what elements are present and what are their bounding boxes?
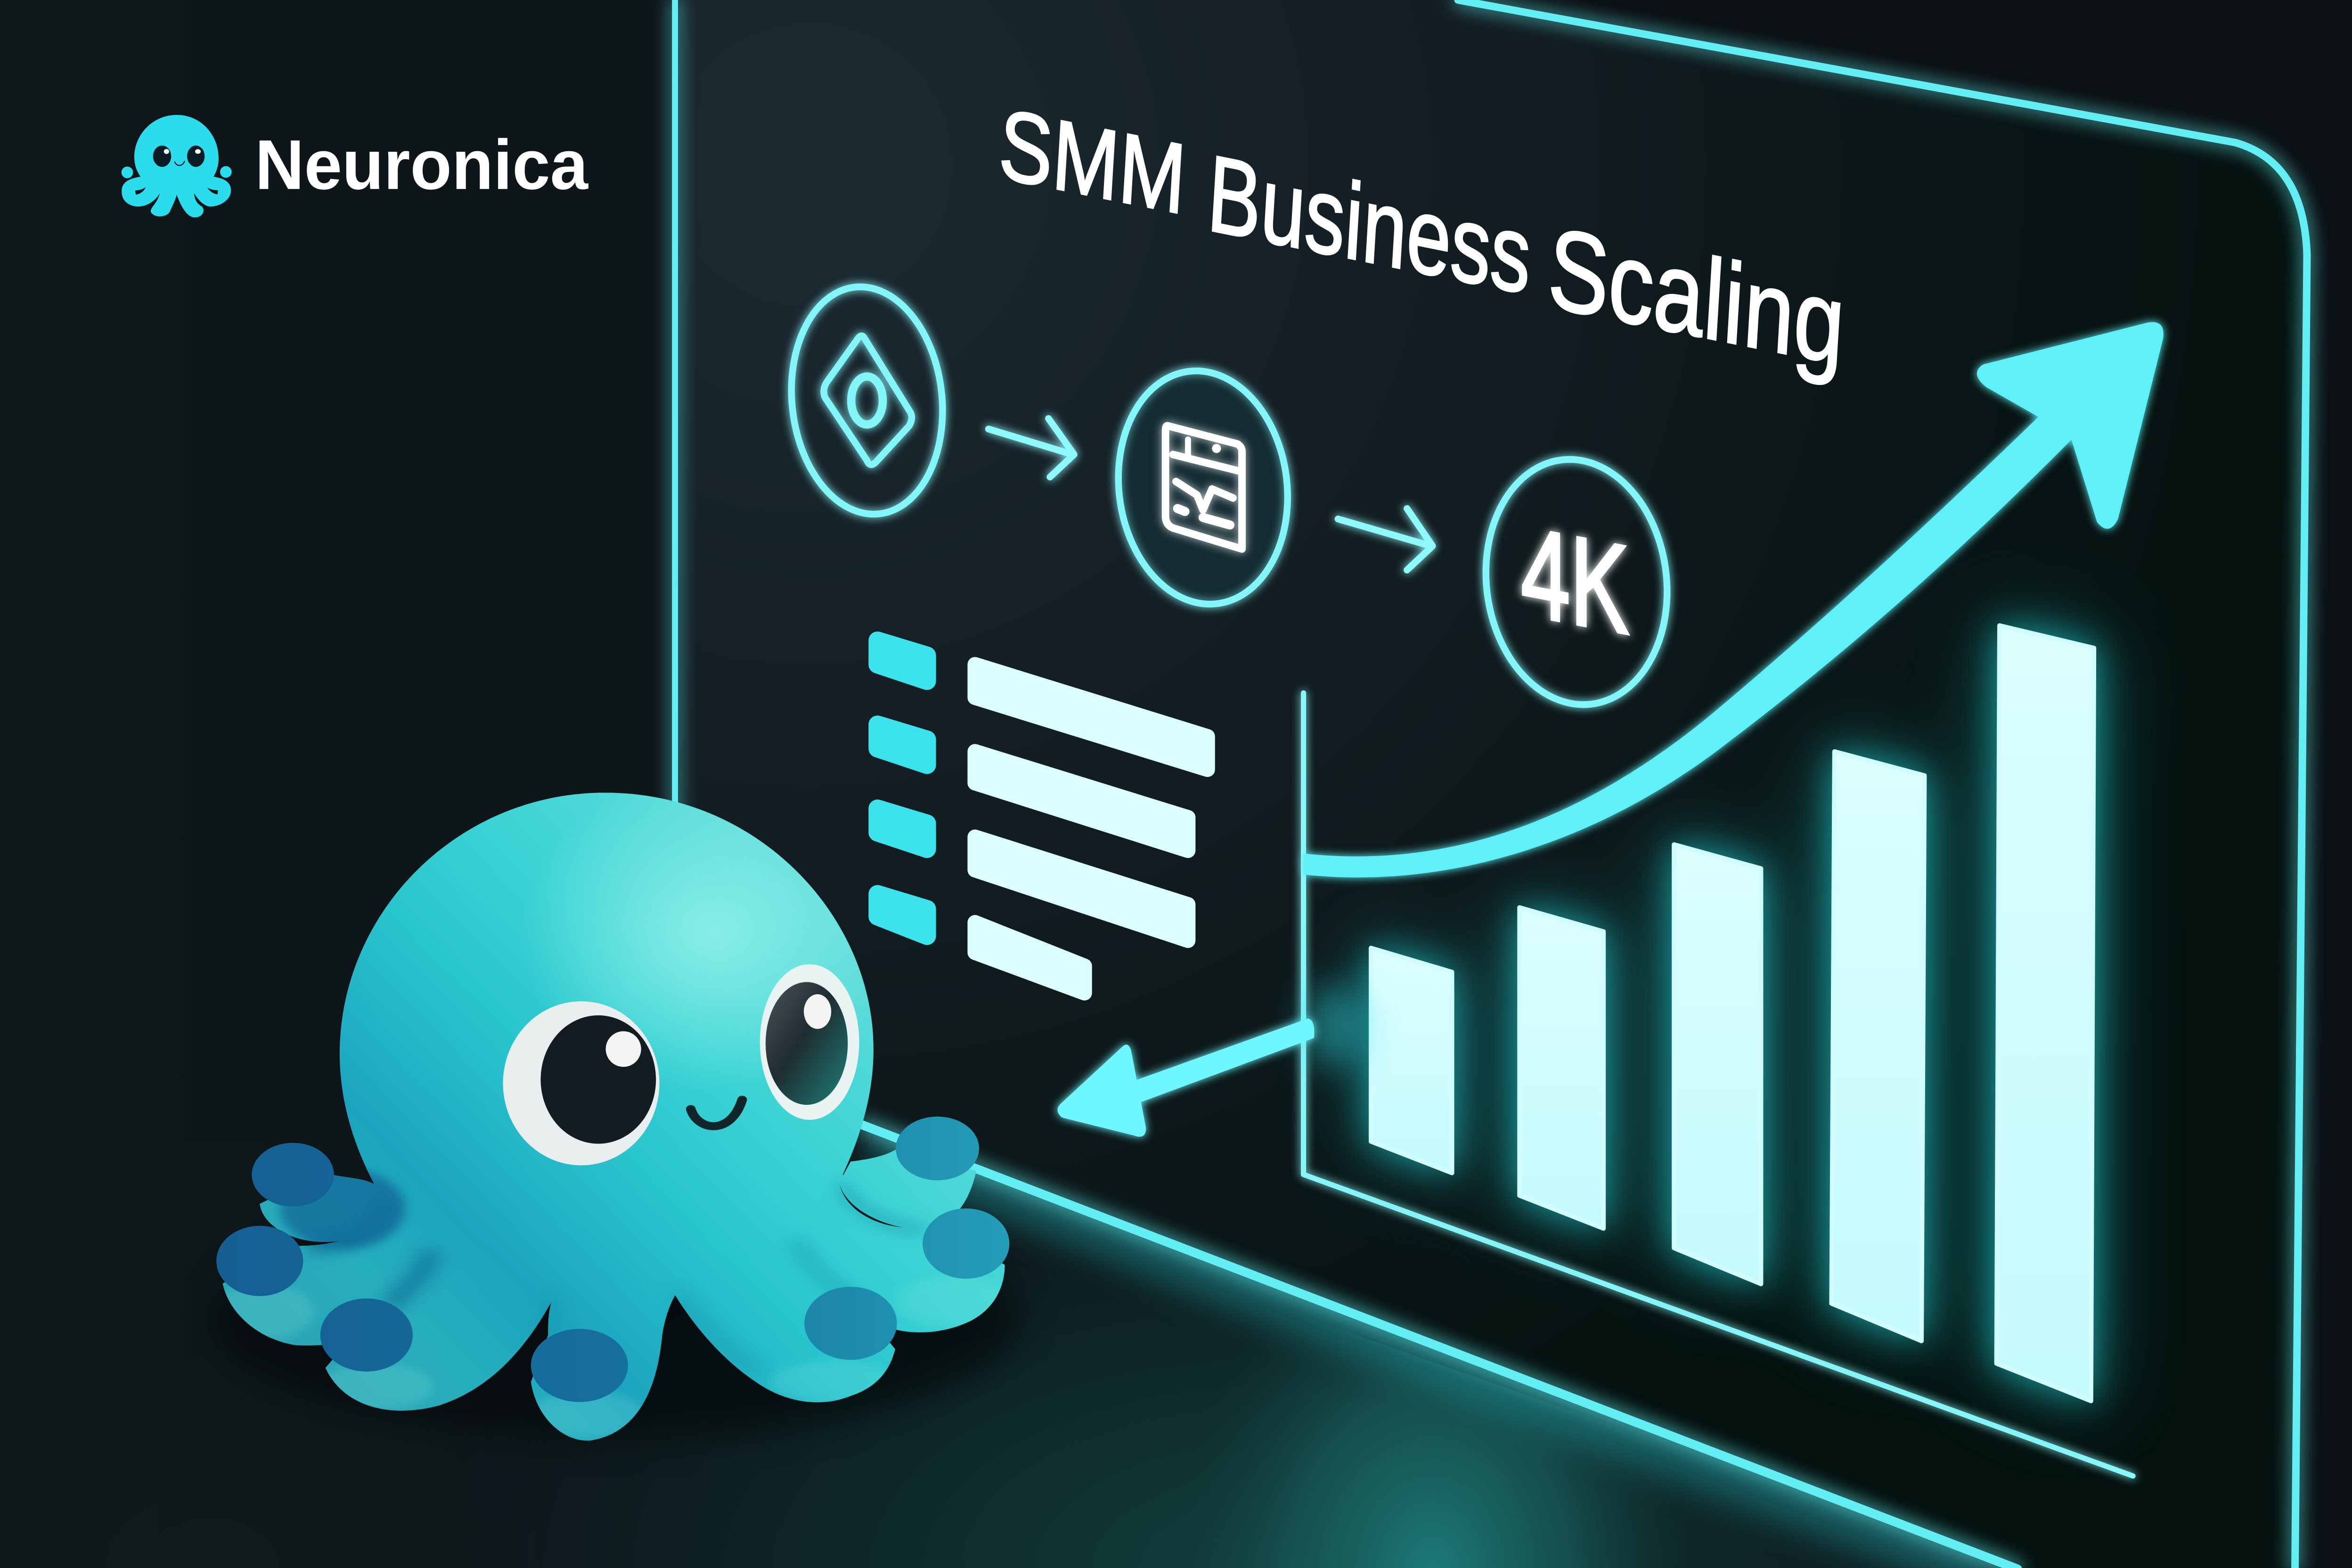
shading and highlights: [211, 773, 1011, 1438]
floor glow along panel edge: [870, 1143, 1995, 1568]
bars: [1371, 626, 2094, 1401]
right eye: [760, 964, 859, 1120]
smile: [691, 1100, 742, 1126]
bar glow: [1370, 624, 2096, 1403]
octopus shadow: [210, 1203, 1020, 1437]
down-left arrow: [1057, 984, 1365, 1137]
arrow shape: [1057, 1019, 1314, 1137]
logo: Neuronica: [122, 115, 589, 218]
bullet markers: [877, 640, 927, 936]
tentacle tips: [216, 1117, 1009, 1402]
icon circle 1: diamond eye: [781, 279, 954, 522]
4K circle: [1472, 449, 1681, 715]
text line bars: [975, 664, 1208, 993]
body and tentacles: [222, 792, 1004, 1441]
growth arrow: [1304, 322, 2164, 877]
4K circle: 4K: [1521, 500, 1629, 661]
left eye: [503, 1001, 660, 1165]
panel neon border: [675, 0, 2307, 1568]
logo wordmark: Neuronica: [255, 125, 589, 204]
list: bullets and lines: [877, 640, 1208, 993]
back-left tentacle shade: [280, 1168, 405, 1248]
tentacle lips: [211, 1276, 1011, 1438]
arrow origin glow: [1305, 984, 1365, 1068]
panel: dashboard screen: [675, 0, 2307, 1568]
octopus mascot: [216, 792, 1009, 1441]
process flow: [781, 279, 1681, 715]
arrow 1: [988, 418, 1074, 477]
floor: [0, 900, 2040, 1568]
icon: logo octopus: [122, 115, 232, 218]
wide bar halo: [1370, 624, 2096, 1403]
title: Scaling: [1545, 203, 1848, 389]
right background above panel: [1440, 0, 2352, 1568]
title: Business: [1205, 132, 1535, 317]
chart axes: [1304, 693, 2133, 1476]
bar chart: [1304, 624, 2133, 1476]
title: [996, 88, 1848, 389]
icon circle 2: dashboard: [1105, 361, 1301, 614]
title: SMM: [996, 88, 1189, 236]
arrow 2: [1338, 508, 1432, 570]
